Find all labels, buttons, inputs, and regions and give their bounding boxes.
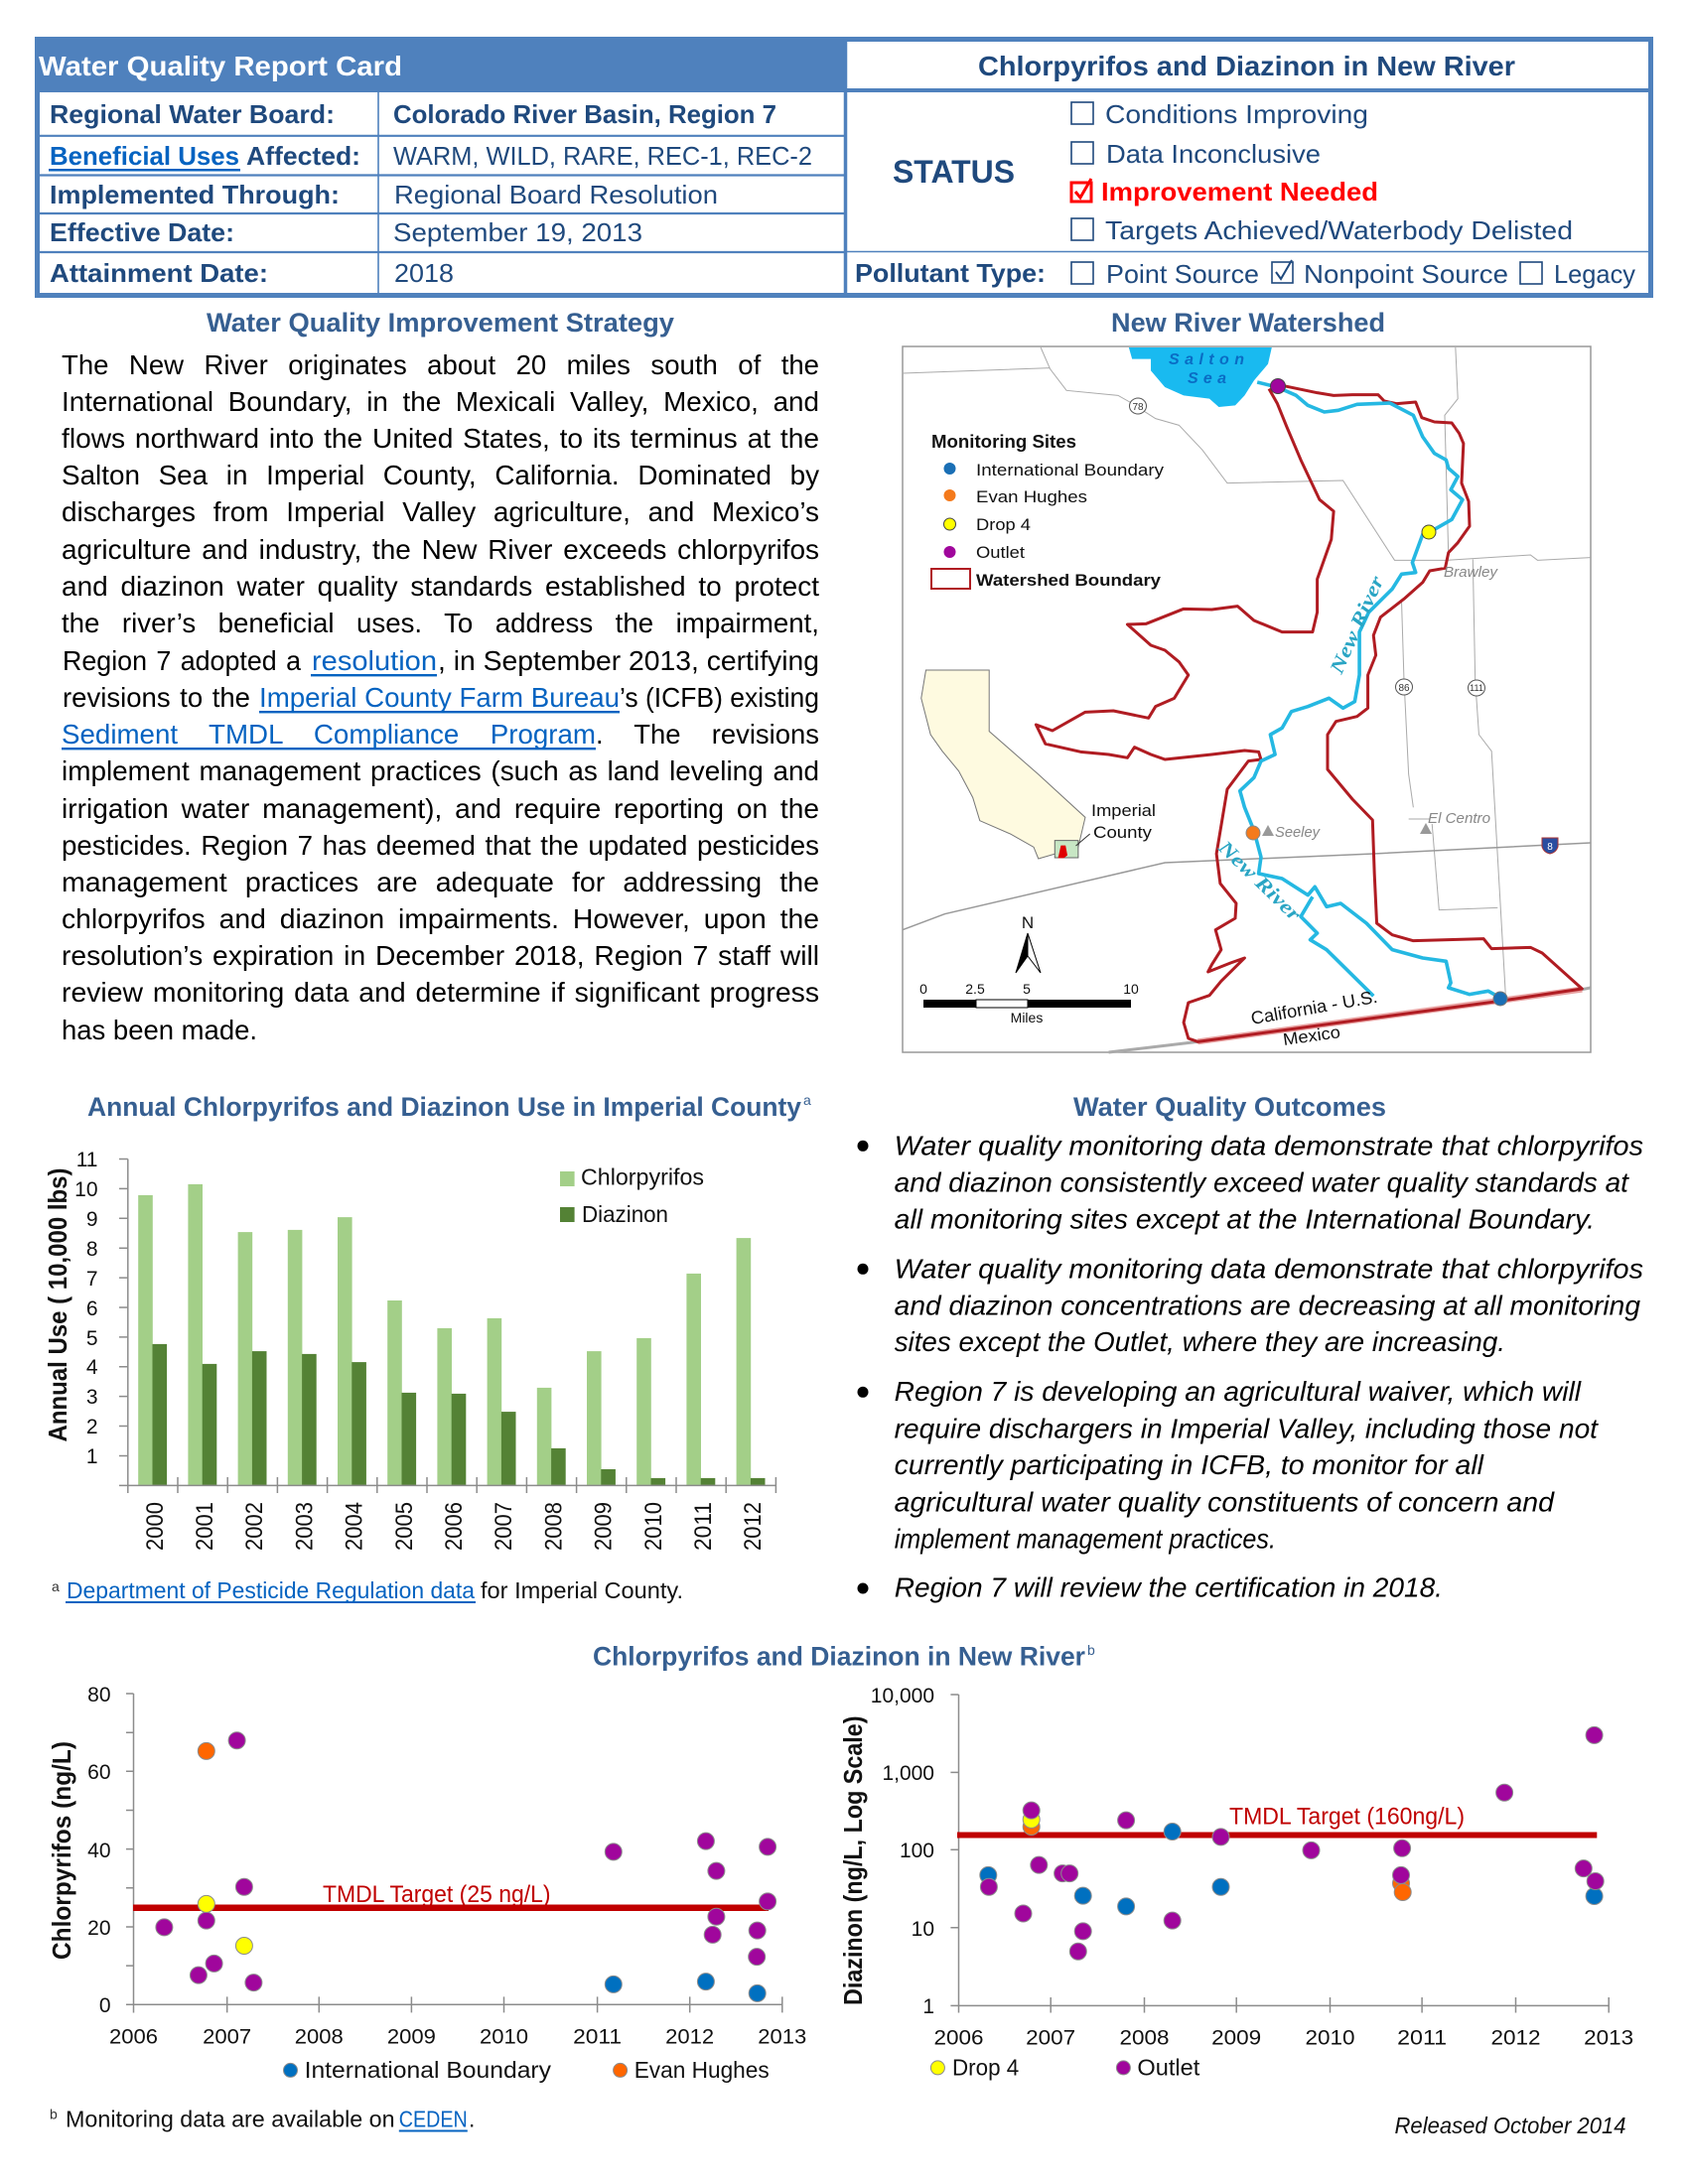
x axis year labels: 2004 [342,1502,368,1551]
outcome bullet 2: and diazinon concentrations are decreasing at all monitoring [895,1290,1640,1320]
bar chart axes [119,1160,775,1493]
y axis labels: 11 [76,1149,97,1171]
strategy paragraph: Imperial County Farm Bureau [259,682,620,713]
y labels [871,1685,934,2018]
legend: international boundary and evan hughes: Evan Hughes [634,2057,770,2083]
bar chart legend [560,1163,704,1227]
outcome bullet 3: require dischargers in Imperial Valley, including those not [895,1413,1599,1443]
x axis year labels: 2000 [142,1502,169,1551]
scale bar: 5 [1023,981,1031,997]
footnote b: b [50,2107,58,2122]
highway shield 78 [1130,398,1146,414]
row: regional water board: Colorado River Basin, Region 7 [393,99,776,129]
strategy paragraph: management practices are adequate for addressing the [62,867,819,897]
highway shield 78: 78 [1132,402,1144,413]
y axis labels [74,1149,98,1468]
outcome bullet 2 [858,1253,1643,1357]
interstate shield 8: 8 [1547,842,1553,853]
outcome bullet 2: sites except the Outlet, where they are increasing. [895,1326,1505,1357]
year labels [109,2026,806,2049]
watershed boundary [1036,385,1582,1041]
strategy paragraph: resolution [312,645,437,676]
strategy paragraph: implement management practices (such as land leveling and [62,755,819,786]
map label: imperial county [1091,801,1156,842]
footnote b: Monitoring data are available on [66,2107,395,2132]
map legend: monitoring sites [931,432,1165,590]
scale bar: 10 [1123,981,1139,997]
pollutant type row: Point Source [1106,259,1259,289]
strategy paragraph: discharges from Imperial Valley agriculture, and Mexico’s [62,496,819,527]
row: regional water board: Regional Water Board: [50,99,335,129]
chart title: Annual Chlorpyrifos and Diazinon Use in Imperial County [87,1092,801,1122]
highway shield 86 [1396,679,1412,695]
map legend: monitoring sites: Evan Hughes [976,487,1087,506]
map label: mexico: Mexico [1282,1023,1341,1049]
y labels: 1 [922,1995,934,2018]
y axis labels: 8 [86,1238,97,1261]
year labels: 2008 [295,2026,344,2049]
row: attainment date: Attainment Date: [50,258,268,288]
footnote a: a [52,1578,60,1594]
tmdl target label: TMDL Target (160ng/L) [1229,1803,1465,1831]
y axis labels: 1 [86,1445,97,1468]
row: effective date: Effective Date: [50,217,234,247]
y labels: 100 [900,1840,934,1862]
outcome bullet 3: implement management practices. [895,1523,1276,1554]
year labels: 2010 [1305,2027,1354,2050]
strategy paragraph: . The revisions [596,719,819,750]
year labels: 2009 [387,2026,436,2049]
row: beneficial uses: WARM, WILD, RARE, REC-1, REC-2 [393,141,812,171]
strategy paragraph: The New River originates about 20 miles south of the [62,349,819,380]
heading: chlorpyrifos and diazinon in new river charts: Chlorpyrifos and Diazinon in New River [593,1642,1085,1672]
strategy paragraph: agriculture and industry, the New River exceeds chlorpyrifos [62,534,819,565]
header band [35,37,846,92]
site marker: outlet [1271,379,1285,393]
y axis labels: 4 [86,1356,98,1379]
y labels: 80 [87,1684,111,1706]
outcome bullet 3: agricultural water quality constituents of concern and [895,1486,1555,1517]
scale bar: Miles [1011,1010,1043,1025]
footnote a: Department of Pesticide Regulation data [67,1577,475,1603]
x axis year labels: 2008 [540,1502,567,1551]
outcome bullet 1: all monitoring sites except at the International Boundary. [895,1204,1595,1235]
chart: chlorpyrifos scatter [47,1684,806,2083]
y axis labels: 3 [86,1386,97,1409]
map label: el centro [1420,810,1490,834]
heading: strategy: Water Quality Improvement Strategy [207,308,674,338]
x axis year labels: 2007 [491,1502,517,1551]
y labels: 20 [87,1917,111,1940]
map label: salton sea [1169,351,1244,387]
map frame [903,346,1591,1052]
row: effective date [50,217,642,247]
map legend: monitoring sites: Outlet [976,543,1025,562]
map label: new river south: New River [1213,836,1305,925]
row: beneficial uses: Beneficial Uses [50,141,239,171]
outcome bullet 1: and diazinon consistently exceed water quality standards at [895,1167,1629,1198]
status: data inconclusive: Data Inconclusive [1106,139,1321,169]
outcome bullet 1: Water quality monitoring data demonstrate that chlorpyrifos [895,1130,1643,1160]
y axis title: Annual Use ( 10,000 lbs) [43,1167,72,1441]
legend: drop 4 and outlet [930,2055,1200,2081]
legend: drop 4 and outlet: Outlet [1137,2055,1200,2081]
strategy paragraph: and diazinon water quality standards established to protect [62,571,819,602]
axes [126,1694,782,2013]
year labels: 2011 [573,2026,622,2049]
year labels: 2007 [203,2026,251,2049]
y axis labels: 7 [86,1268,97,1291]
salton sea [1129,347,1272,407]
map label: brawley: Brawley [1444,564,1499,581]
x axis year labels: 2010 [640,1502,667,1551]
outcome bullet 3: Region 7 is developing an agricultural waiver, which will [895,1376,1582,1407]
strategy paragraph: Region 7 adopted a [63,645,301,676]
map label: california us border: California - U.S. [1249,987,1379,1028]
map label: imperial county: Imperial [1091,801,1156,820]
panel: new river watershed map [903,308,1591,1052]
y labels [87,1684,111,2017]
map label: salton sea: Sea [1188,370,1226,387]
year labels: 2012 [1491,2027,1541,2050]
strategy paragraph: irrigation water management), and require reporting on the [62,793,819,824]
heading: chlorpyrifos and diazinon in new river charts: b [1087,1642,1095,1658]
x axis year labels: 2002 [241,1502,268,1551]
outcome bullet 2: Water quality monitoring data demonstrate that chlorpyrifos [895,1253,1643,1284]
chart title: a [803,1092,811,1108]
california inset [921,670,1085,859]
release date: Released October 2014 [1394,2113,1626,2138]
international border [1109,988,1591,1052]
table frame and grid [38,37,1650,298]
strategy paragraph: review monitoring data and determine if significant progress [62,977,819,1008]
row: implemented through [50,180,718,209]
y axis labels: 2 [86,1416,97,1438]
x axis year labels: 2001 [192,1502,218,1551]
pollutant type row: Legacy [1554,259,1635,289]
north arrow: N [1022,913,1034,932]
strategy paragraph: revisions to the [63,682,250,713]
panel: report card table [35,37,1650,298]
axes [950,1695,1609,2013]
strategy paragraph: the river’s beneficial uses. To address the impairment, [62,608,819,638]
north arrow [1016,913,1041,973]
year labels: 2011 [1397,2027,1447,2050]
strategy paragraph: Sediment TMDL Compliance Program [62,719,596,750]
y labels: 40 [87,1840,111,1862]
map artwork [903,347,1591,1052]
year labels: 2009 [1211,2027,1261,2050]
bar chart legend: Diazinon [582,1201,668,1227]
interstate shield 8 [1542,838,1558,854]
year labels: 2006 [933,2027,983,2050]
data points [980,1726,1604,1960]
row: attainment date: 2018 [394,258,454,288]
x axis year labels: 2005 [391,1502,418,1551]
y labels: 10,000 [871,1685,934,1707]
map label: new river north: New River [1326,573,1388,678]
panel: water quality outcomes [858,1092,1643,1602]
footnote a [52,1577,683,1603]
highway shield 111 [1468,680,1485,696]
row: beneficial uses [49,141,812,171]
strategy paragraph: flows northward into the United States, to its terminus at the [62,423,819,454]
status label: STATUS [893,154,1015,190]
row: regional water board [50,99,776,129]
site marker: drop 4 [1422,525,1436,539]
row: implemented through: Regional Board Resolution [394,180,718,209]
row: beneficial uses: Affected: [246,141,360,171]
strategy paragraph: pesticides. Region 7 has deemed that the updated pesticides [62,830,819,861]
site marker: international boundary [1493,992,1507,1006]
y labels: 10 [912,1918,934,1941]
roads [903,347,1591,996]
x axis year labels: 2009 [591,1502,618,1551]
map legend: monitoring sites: Monitoring Sites [931,432,1076,452]
year labels: 2006 [109,2026,158,2049]
year labels: 2012 [665,2026,714,2049]
row: attainment date [50,258,454,288]
year labels: 2008 [1120,2027,1170,2050]
strategy paragraph: ’s (ICFB) existing [620,682,819,713]
pollutant type row: Nonpoint Source [1304,259,1508,289]
x axis year labels: 2011 [690,1502,717,1551]
status: improvement needed (checked): Improvement Needed [1101,177,1378,206]
scale bar: 0 [919,981,927,997]
data points [156,1732,776,2001]
y labels: 60 [87,1761,111,1784]
map legend: monitoring sites: Drop 4 [976,515,1031,534]
status: targets achieved: Targets Achieved/Waterbody Delisted [1105,215,1573,245]
imperial county inset [1055,834,1090,858]
y labels: 1,000 [882,1762,934,1785]
heading: new river watershed: New River Watershed [1111,308,1385,338]
y axis labels: 9 [86,1208,97,1231]
pollutant type row [855,258,1635,289]
y axis title: Chlorpyrifos (ng/L) [47,1741,76,1960]
year labels: 2007 [1026,2027,1075,2050]
footnote a: for Imperial County. [481,1577,683,1603]
x axis year labels: 2006 [441,1502,468,1551]
year labels: 2013 [758,2026,806,2049]
strategy paragraph: International Boundary, in the Mexicali Valley, Mexico, and [62,386,819,417]
panel: annual use bar chart [43,1092,811,1603]
scale bar [919,981,1139,1025]
row: implemented through: Implemented Through: [50,180,340,209]
pollutant type row: Pollutant Type: [855,258,1046,288]
x axis year labels: 2012 [740,1502,767,1551]
chlorpyrifos bars [138,1184,751,1485]
outcome bullet 4: Region 7 will review the certification in 2018. [895,1571,1443,1602]
outcome bullet 1 [858,1130,1643,1235]
y axis labels: 6 [86,1297,97,1320]
map legend: monitoring sites: Watershed Boundary [976,571,1162,590]
map legend: monitoring sites: International Boundary [976,461,1165,479]
y labels: 0 [99,1994,111,2017]
status: conditions improving: Conditions Improving [1105,99,1368,129]
year labels [933,2027,1633,2050]
footnote b: . [469,2107,475,2132]
year labels: 2013 [1584,2027,1633,2050]
x axis year labels: 2003 [291,1502,318,1551]
outcome bullet 3: currently participating in ICFB, to monitor for all [895,1449,1484,1480]
new river [1240,382,1500,998]
map label: el centro: El Centro [1428,810,1490,827]
panel: water quality improvement strategy [62,308,819,1045]
legend: international boundary and evan hughes: International Boundary [305,2057,552,2083]
year labels: 2010 [480,2026,528,2049]
footnote b: CEDEN [399,2107,468,2132]
y axis title: Diazinon (ng/L, Log Scale) [838,1715,868,2005]
heading: water quality report card: Water Quality Report Card [39,51,402,81]
strategy paragraph: has been made. [62,1015,257,1045]
strategy paragraph: Salton Sea in Imperial County, California. Dominated by [62,460,819,490]
tmdl target line [957,1833,1597,1839]
strategy paragraph: resolution’s expiration in December 2018, Region 7 staff will [62,940,819,971]
strategy paragraph: , in September 2013, certifying [438,645,819,676]
x axis year labels [142,1502,767,1551]
site marker: evan hughes [1246,826,1260,840]
map label: imperial county: County [1093,823,1153,842]
map label: seeley: Seeley [1275,824,1321,841]
tmdl target label: TMDL Target (25 ng/L) [323,1881,550,1908]
chart: diazinon scatter [838,1685,1633,2081]
heading: chlorpyrifos and diazinon in new river: Chlorpyrifos and Diazinon in New River [978,51,1515,81]
heading: outcomes: Water Quality Outcomes [1073,1092,1386,1122]
outcome bullet 3 [858,1376,1599,1554]
bar chart legend: Chlorpyrifos [581,1163,704,1189]
strategy paragraph: chlorpyrifos and diazinon impairments. However, upon the [62,903,819,934]
scale bar: 2.5 [965,981,985,997]
strategy paragraph [62,349,819,1045]
y axis labels: 5 [86,1327,97,1350]
diazinon bars [153,1344,765,1485]
y axis labels: 10 [74,1178,97,1201]
map label: salton sea: Salton [1169,351,1244,368]
tmdl target line [133,1904,769,1911]
row: effective date: September 19, 2013 [393,217,642,247]
highway shield 86: 86 [1398,683,1410,694]
legend: international boundary and evan hughes [284,2057,770,2083]
highway shield 111: 111 [1470,683,1483,693]
legend: drop 4 and outlet: Drop 4 [952,2055,1019,2081]
